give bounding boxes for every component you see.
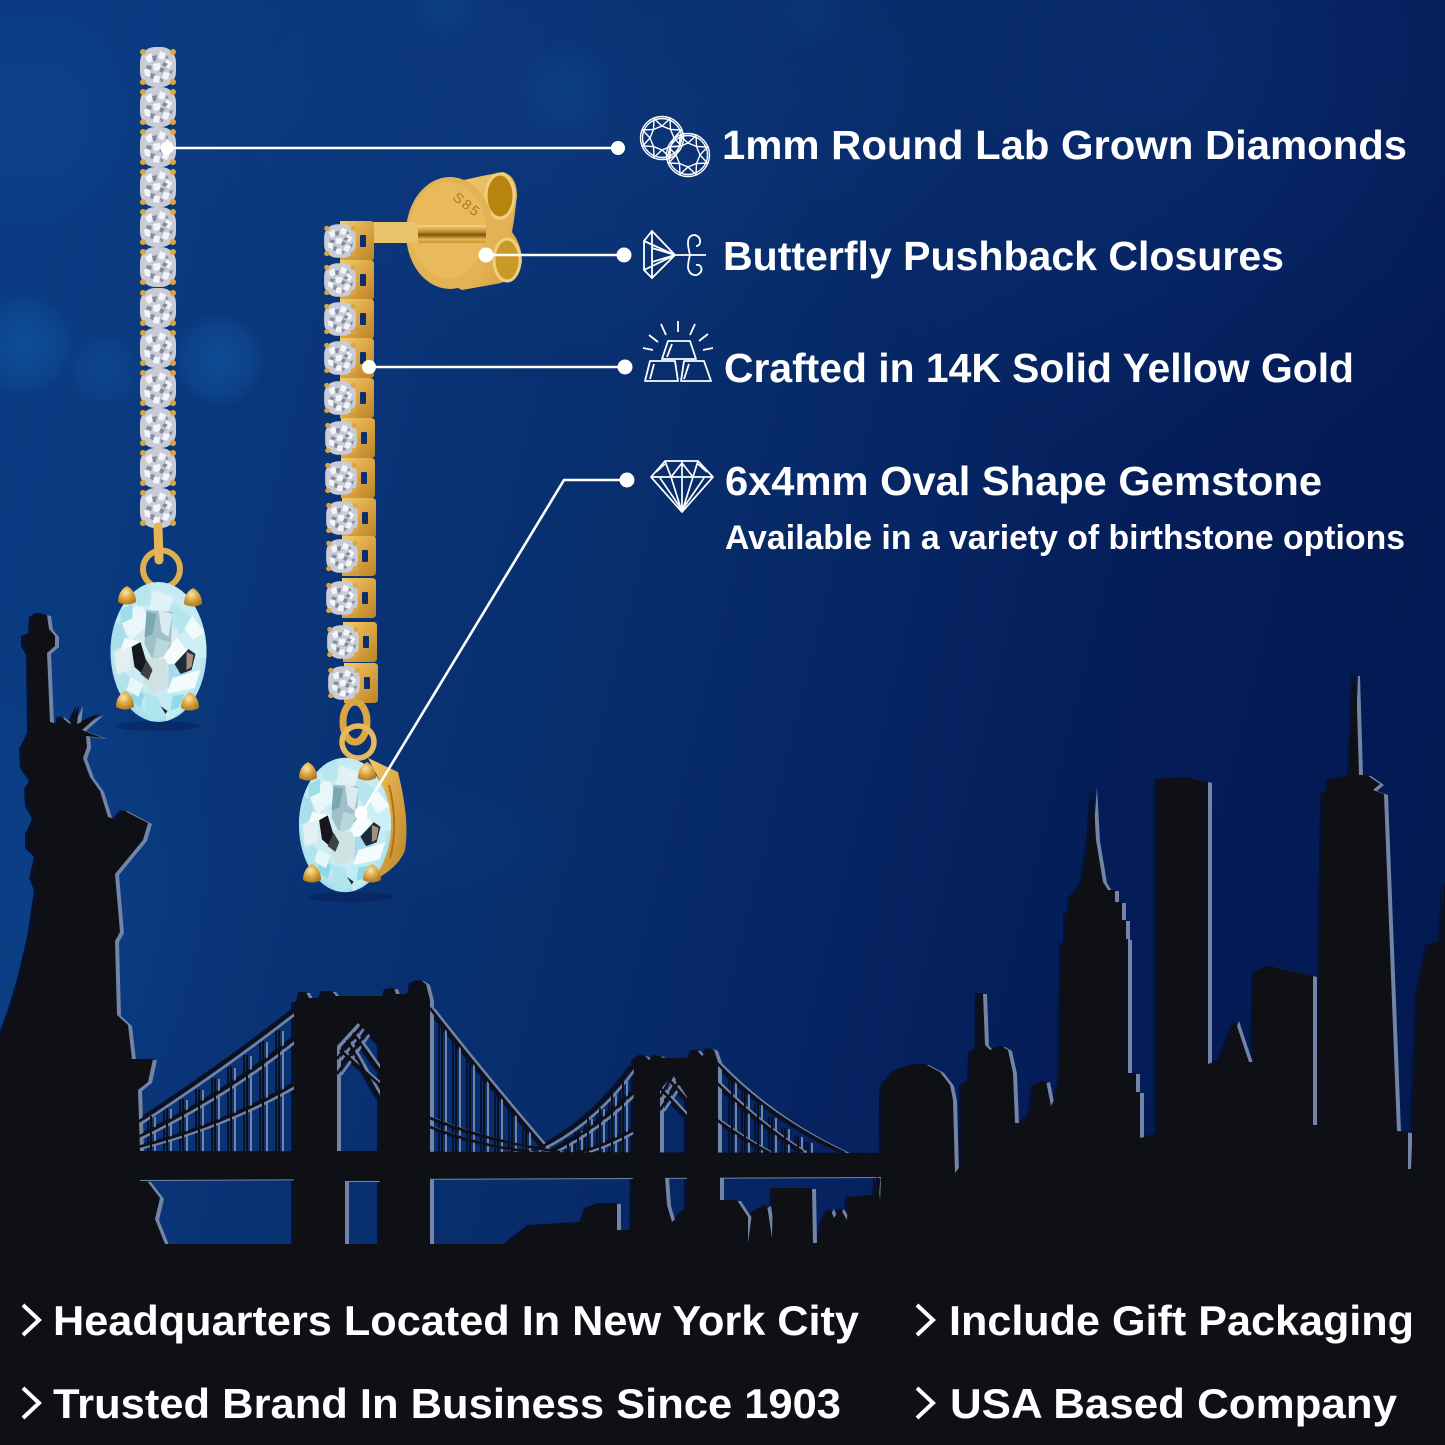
skyline: Statue of Liberty, bridge and Manhattan silhouette with lit edges <box>0 613 1445 1445</box>
butterfly pushback closure: S85 <box>450 189 484 220</box>
list item: USA based: USA Based Company <box>950 1380 1398 1427</box>
list item: headquarters: Headquarters Located In New York City <box>53 1297 860 1344</box>
butterfly pushback closure <box>363 172 522 290</box>
icon: stacked gold bars <box>643 321 713 381</box>
subheading: birthstone options: Available in a variety of birthstone options <box>725 519 1405 557</box>
oval gemstone with setting <box>299 758 406 902</box>
diamond chain <box>140 47 176 528</box>
leader: closures <box>478 248 632 262</box>
heading: gemstone: 6x4mm Oval Shape Gemstone <box>725 458 1322 504</box>
diamond chain with gold links <box>324 221 378 703</box>
icon: round diamonds <box>640 116 710 176</box>
gold link <box>342 702 374 758</box>
heading: closures: Butterfly Pushback Closures <box>723 233 1284 279</box>
list item: trusted brand: Trusted Brand In Business Since 1903 <box>53 1380 841 1427</box>
left earring <box>110 47 208 731</box>
icon: diamond stud with butterfly back <box>644 231 706 278</box>
heading: diamonds: 1mm Round Lab Grown Diamonds <box>722 122 1407 168</box>
right earring <box>299 172 522 902</box>
callout leader lines <box>160 141 634 820</box>
gold link <box>143 527 180 588</box>
list item: packaging: Include Gift Packaging <box>949 1297 1414 1344</box>
icon: gemstone <box>651 461 713 512</box>
oval gemstone <box>110 582 208 731</box>
leader: gemstone <box>354 472 634 820</box>
chevrons for bottom list <box>23 1305 933 1418</box>
heading: gold: Crafted in 14K Solid Yellow Gold <box>724 345 1354 391</box>
leader: diamonds <box>160 141 625 155</box>
leader: gold <box>362 360 632 374</box>
